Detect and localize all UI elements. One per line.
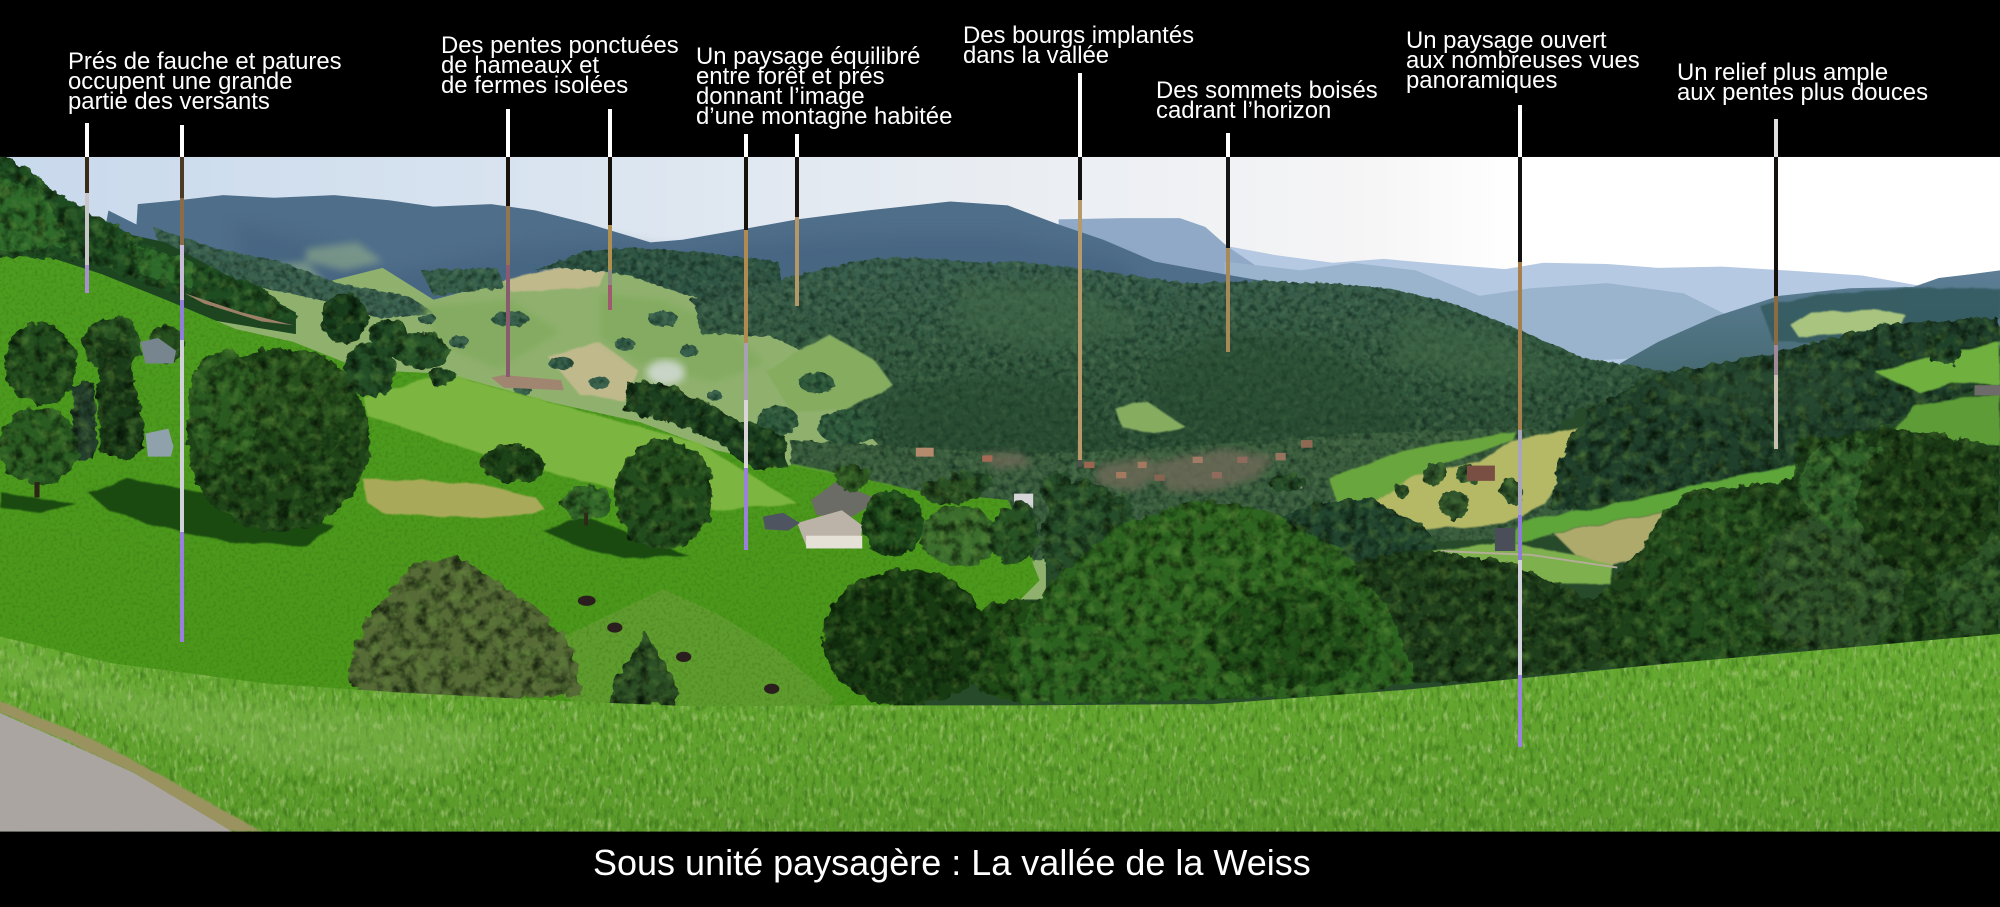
lone trees on pasture xyxy=(481,439,714,551)
left and central slate ridges xyxy=(106,195,1262,300)
caption: paysage ouvert: Un paysage ouvert aux nombreuses vues panoramiques xyxy=(1406,27,1640,94)
pale left grass xyxy=(0,651,510,778)
olive bush xyxy=(347,555,580,702)
upper tree cluster xyxy=(321,293,453,397)
village xyxy=(916,440,1312,509)
green band field xyxy=(1505,463,1809,548)
distant pale meadow xyxy=(1791,310,1906,337)
callout line: versants xyxy=(180,125,184,642)
photo layers xyxy=(0,128,2000,832)
caption: pentes ponctuées: Des pentes ponctuées de hameaux et de fermes isolées xyxy=(441,32,679,99)
caption: relief: Un relief plus ample aux pentes plus douces xyxy=(1677,59,1928,106)
left valley forest patches xyxy=(418,247,804,401)
dark valley underlay xyxy=(915,357,2000,706)
far blue mountains on the right xyxy=(1230,246,1918,364)
small fir xyxy=(610,631,679,705)
village trees xyxy=(946,472,1306,573)
caption: bourgs: Des bourgs implantés dans la vallée xyxy=(963,22,1194,69)
yellow hay slope xyxy=(1376,427,1579,530)
flat-topped blue ridge xyxy=(1058,218,1254,274)
meadow right lower xyxy=(1888,393,2000,446)
callout line: fermes isolées xyxy=(608,109,612,310)
striped mown field xyxy=(1554,503,1716,565)
callout line: hameaux xyxy=(506,109,510,377)
right mountain forest band xyxy=(1760,288,2000,342)
title: Sous unité paysagère : La vallée de la Weiss xyxy=(593,842,1311,883)
mid blue mountain layer xyxy=(1224,262,1724,360)
farm roof xyxy=(1467,466,1495,481)
forest pockets in the clearing xyxy=(758,372,879,445)
main forested hill xyxy=(695,258,1671,462)
farm buildings near centre xyxy=(763,482,880,548)
trunk of left tree xyxy=(34,482,40,497)
cows xyxy=(578,596,779,694)
bank of red earth xyxy=(185,293,293,325)
lit forest crowns xyxy=(0,159,191,287)
tree shadows on pasture xyxy=(0,478,689,559)
callout line: relief xyxy=(1774,119,1778,449)
trees by the farm xyxy=(834,464,1036,566)
gravel road xyxy=(0,713,232,832)
sunlit fields beyond the village xyxy=(1328,432,1516,502)
callout line: paysage équilibré xyxy=(744,134,748,550)
hamlet at mid left xyxy=(491,375,564,390)
meadow top right xyxy=(1875,342,2000,393)
central grassy mound xyxy=(548,589,835,714)
smoke xyxy=(647,360,685,385)
forest hugging the left hill xyxy=(153,227,434,319)
callout line: prés de fauche xyxy=(85,123,89,293)
left tree group xyxy=(0,316,184,485)
lit right forest canopy xyxy=(1645,360,1875,415)
tree top right xyxy=(1929,333,1962,366)
mown slope stripes xyxy=(364,374,797,510)
valley meadows, left side xyxy=(216,268,1046,600)
sky xyxy=(0,157,2000,832)
pale ploughed field xyxy=(504,261,638,402)
valley floor xyxy=(791,427,1582,561)
dirt road edge xyxy=(0,702,261,832)
right forest xyxy=(1550,316,2000,510)
field trees and farm xyxy=(1276,463,1522,568)
caption: prés de fauche: Prés de fauche et patures occupent une grande partie des versants xyxy=(68,48,342,115)
big dark tree xyxy=(186,348,370,532)
green slope behind the farm xyxy=(791,463,1033,561)
caption: sommets boisés: Des sommets boisés cadrant l’horizon xyxy=(1156,77,1378,124)
ridge shading xyxy=(250,238,1032,254)
callout line: sommets xyxy=(1226,133,1230,352)
chapel and houses xyxy=(140,338,176,457)
trunk xyxy=(584,513,588,526)
cut hay patch xyxy=(364,480,546,517)
foreground tree masses xyxy=(823,427,2000,707)
lower valley meadow xyxy=(1429,542,1614,584)
callout line: bourgs xyxy=(1078,73,1082,460)
caption: paysage équilibré: Un paysage équilibré entre forêt et prés donnant l’image d’une montagne habitée xyxy=(696,43,952,130)
big left pasture xyxy=(0,255,1040,714)
foreground grass meadow xyxy=(0,634,2000,832)
right blue mountain xyxy=(1620,270,2000,375)
left forest underlay xyxy=(0,223,296,334)
greener meadow strip xyxy=(421,293,765,383)
forest strip below smoke xyxy=(625,383,787,469)
building top right xyxy=(1974,385,2000,395)
distant clearings xyxy=(280,240,382,278)
callout line: paysage ouvert xyxy=(1518,105,1522,747)
forest ridge shadow folds xyxy=(894,338,1394,448)
left forest xyxy=(0,128,296,321)
farm at valley floor xyxy=(1441,528,1617,568)
valley meadow clearings xyxy=(765,334,1186,434)
callout line: forêt et prés xyxy=(795,134,799,306)
lit forest slopes xyxy=(957,281,1569,383)
